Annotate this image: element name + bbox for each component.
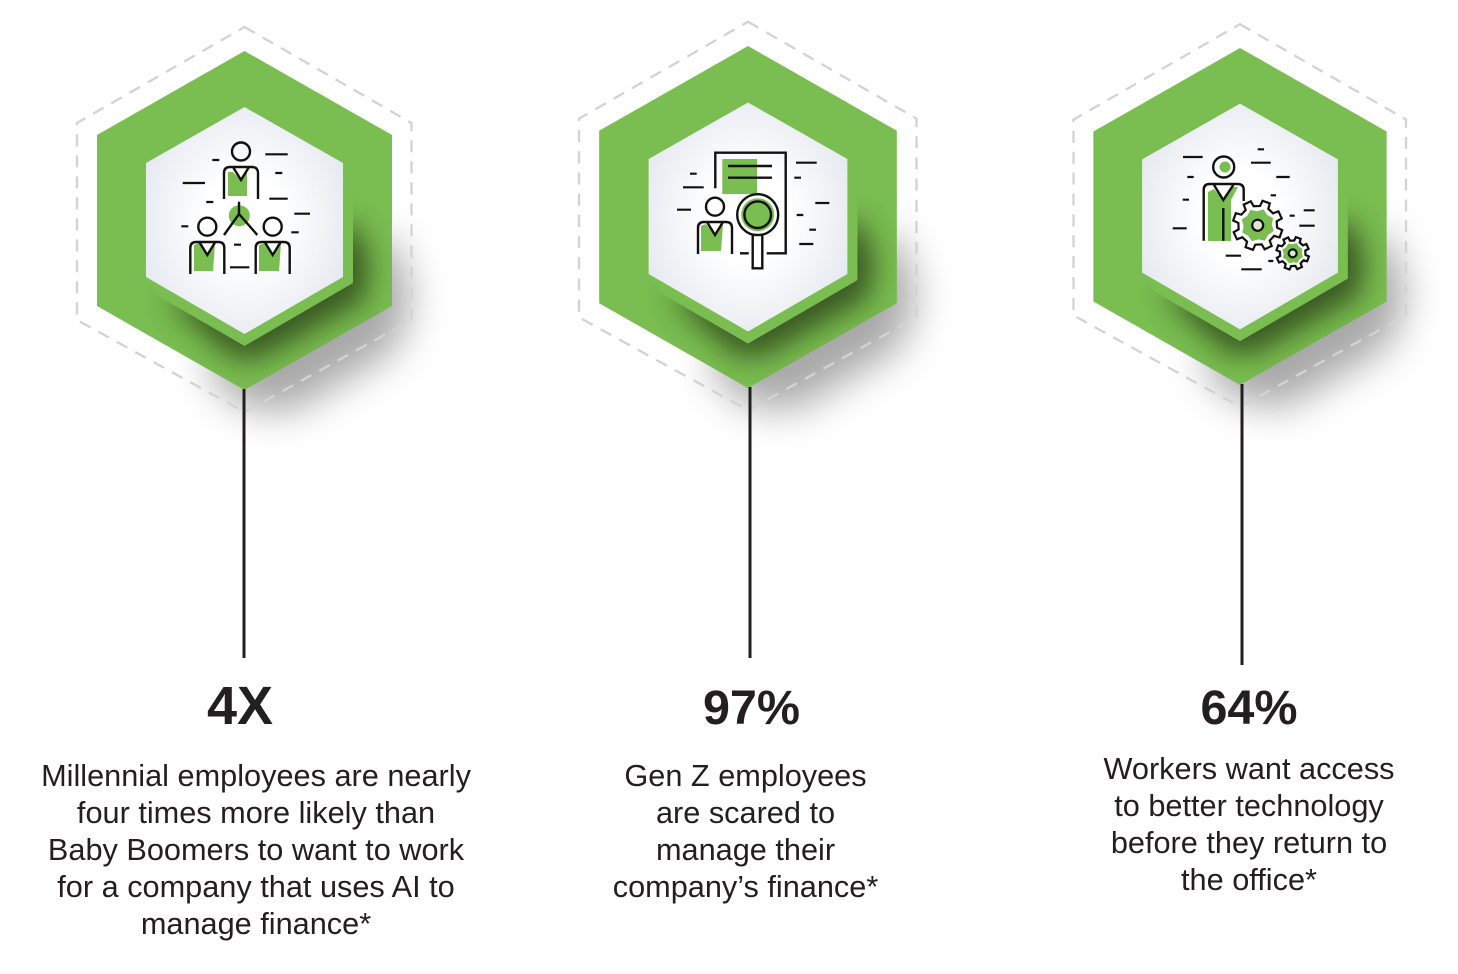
stat: 4X: 4X [207, 676, 273, 736]
icon: worker with gears [1173, 149, 1315, 274]
stat: 64%: 64% [1200, 681, 1298, 735]
description 3: before they return to [1111, 825, 1387, 860]
description 3: Workers want access [1103, 751, 1395, 786]
description 3: to better technology [1114, 788, 1384, 823]
icon: person reviewing document with magnifier [677, 153, 829, 268]
panel: gen z employees [579, 22, 917, 904]
connector line 3 [1240, 384, 1244, 665]
description 3 [1103, 751, 1395, 897]
description 2: manage their [656, 832, 835, 867]
description 2 [613, 758, 878, 904]
description 1 [41, 758, 472, 941]
description 2: are scared to [656, 795, 835, 830]
stat: 97%: 97% [703, 681, 800, 735]
panel: millennial employees [41, 27, 472, 941]
description 1: four times more likely than [77, 795, 435, 830]
icon: team of three people [181, 142, 310, 274]
hexagon badge 3 [1074, 24, 1406, 407]
description 3: the office* [1181, 862, 1317, 897]
description 1: Millennial employees are nearly [41, 758, 472, 793]
description 2: Gen Z employees [624, 758, 867, 793]
hexagon badge 2 [579, 22, 917, 410]
description 1: manage finance* [141, 906, 371, 941]
connector line 1 [242, 389, 246, 658]
panel: workers [1074, 24, 1406, 897]
hexagon badge 1 [77, 27, 412, 412]
description 1: Baby Boomers to want to work [48, 832, 465, 867]
description 1: for a company that uses AI to [57, 869, 455, 904]
description 2: company’s finance* [613, 869, 878, 904]
connector line 2 [748, 387, 752, 658]
